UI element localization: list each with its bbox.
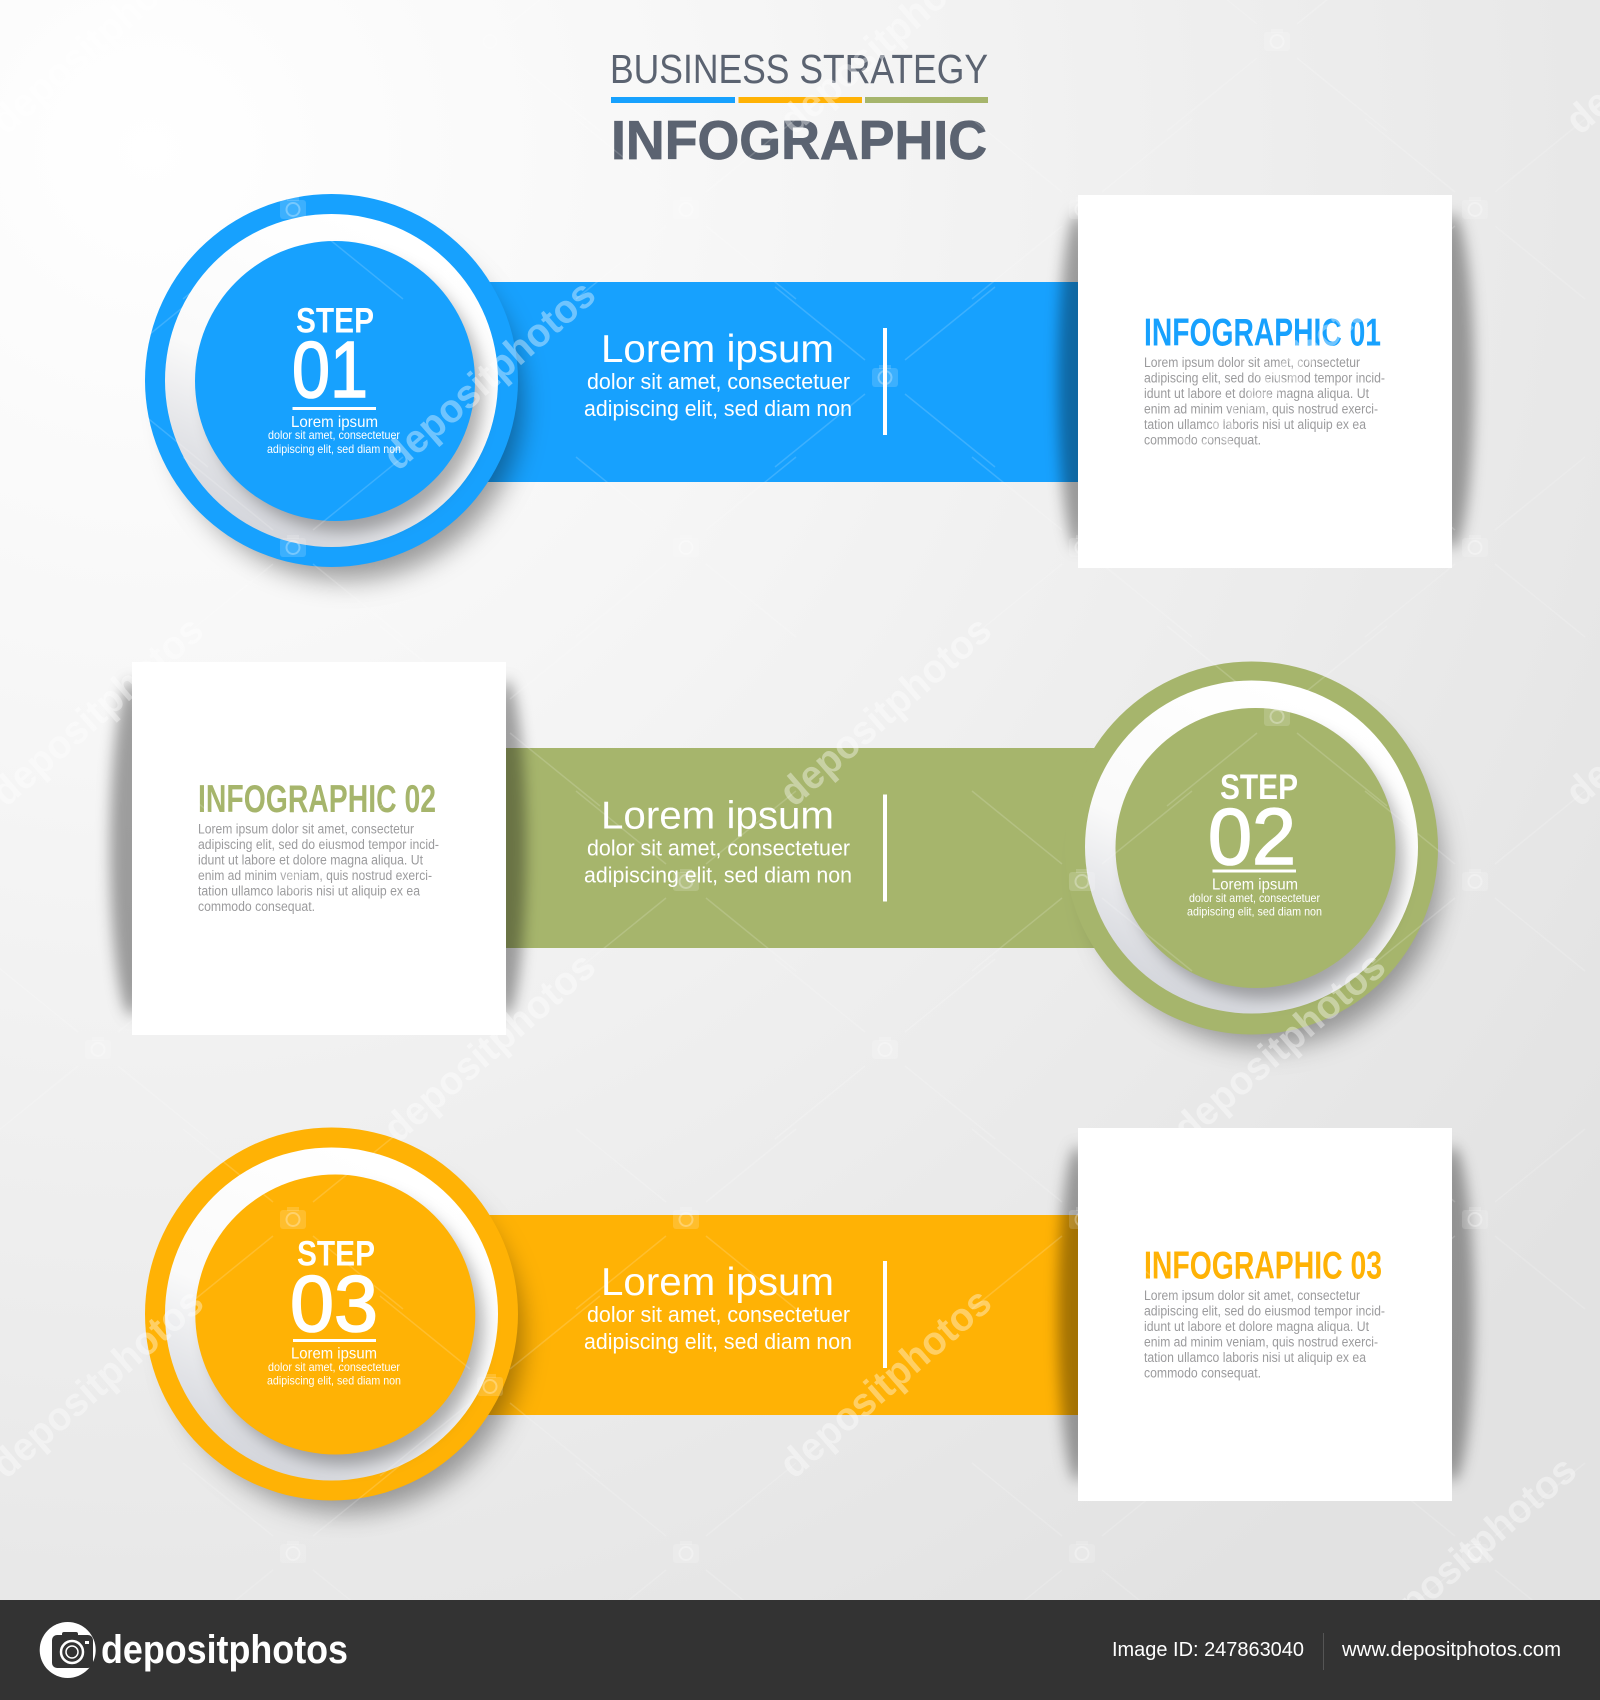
step 03 label (267, 1234, 401, 1388)
band 01 text: dolor sit amet, consectetuer (587, 369, 850, 394)
card 03 body: tation ullamco laboris nisi ut aliquip ex ea (1144, 1350, 1366, 1365)
step 01 label: 01 (292, 325, 368, 414)
band 02 text: adipiscing elit, sed diam non (584, 862, 852, 888)
card 03 heading: INFOGRAPHIC 03 (1144, 1244, 1382, 1288)
band 01 text: Lorem ipsum (601, 328, 834, 371)
band 03 (470, 1215, 1078, 1415)
footer bar (0, 1600, 1600, 1700)
card 01 body: tation ullamco laboris nisi ut aliquip ex ea (1144, 417, 1366, 432)
card 01 shadow (1058, 213, 1474, 549)
title colour rule (611, 97, 988, 103)
step 02 label: dolor sit amet, consectetuer (1189, 891, 1320, 905)
footer logo text: depositphotos (101, 1628, 348, 1672)
band 02 text (584, 794, 887, 902)
circle 02 (1065, 662, 1438, 1034)
watermark overlay: depositphotos (375, 944, 604, 1151)
card 03 (1078, 1128, 1452, 1501)
footer image id: Image ID: 247863040 (1112, 1639, 1304, 1661)
band 01 text: adipiscing elit, sed diam non (584, 396, 852, 421)
step 01 label: STEP (296, 302, 374, 340)
title: infographic: INFOGRAPHIC (611, 109, 987, 171)
watermark overlay: depositphotos (771, 608, 1000, 815)
card 03 shadow (1058, 1146, 1474, 1482)
panel: step 01 (145, 194, 1474, 580)
card 01 body: commodo consequat. (1144, 432, 1261, 448)
watermark overlay: depositphotos (1165, 944, 1394, 1151)
card 03 body: adipiscing elit, sed do eiusmod tempor incid- (1144, 1304, 1385, 1318)
step 01 label: adipiscing elit, sed diam non (267, 442, 401, 456)
circle 02 shadow (1090, 695, 1442, 1047)
band 03 text: dolor sit amet, consectetuer (587, 1302, 850, 1327)
band 01 (470, 282, 1078, 482)
step 01 label (267, 302, 401, 456)
step 02 label: Lorem ipsum (1212, 876, 1298, 894)
watermark overlay: depositphotos (1356, 1448, 1585, 1655)
band 02 text: dolor sit amet, consectetuer (587, 836, 850, 860)
step 02 label: STEP (1220, 768, 1298, 807)
step 03 label: adipiscing elit, sed diam non (267, 1374, 401, 1388)
card 01 body (1144, 355, 1385, 448)
circle 03 shadow (170, 1161, 522, 1513)
card 02 body (198, 822, 439, 914)
band 02 (505, 748, 1205, 948)
title block (610, 46, 988, 171)
icon: camera logo (40, 1622, 96, 1678)
card 01 body: enim ad minim veniam, quis nostrud exerci- (1144, 402, 1378, 416)
band 01 text (584, 328, 887, 435)
circle 01 shadow (170, 228, 522, 580)
step 01 label: Lorem ipsum (291, 414, 378, 431)
card 02 (132, 662, 506, 1035)
card 02 shadow (110, 680, 526, 1016)
circle 01 (145, 194, 518, 567)
card 03 body (1144, 1288, 1385, 1380)
card 02 body: adipiscing elit, sed do eiusmod tempor incid- (198, 837, 439, 852)
step 02 label: adipiscing elit, sed diam non (1187, 904, 1322, 918)
step 03 label: Lorem ipsum (291, 1346, 377, 1362)
watermark overlay: depositphotos (1165, 272, 1394, 479)
panel: step 03 (145, 1128, 1474, 1513)
step 02 label (1187, 768, 1322, 918)
step 02 label: 02 (1208, 792, 1296, 881)
card 01 body: idunt ut labore et dolore magna aliqua. Ut (1144, 386, 1369, 401)
circle 03 (145, 1128, 518, 1500)
card 01 body: Lorem ipsum dolor sit amet, consectetur (1144, 355, 1360, 370)
card 02 body: tation ullamco laboris nisi ut aliquip ex ea (198, 884, 420, 898)
card 01 heading: INFOGRAPHIC 01 (1144, 312, 1381, 354)
card 02 body: commodo consequat. (198, 899, 315, 914)
step 03 label: 03 (290, 1259, 378, 1348)
card 03 body: Lorem ipsum dolor sit amet, consectetur (1144, 1288, 1360, 1303)
step 01 label: dolor sit amet, consectetuer (268, 428, 400, 442)
card 01 body: adipiscing elit, sed do eiusmod tempor incid- (1144, 370, 1385, 386)
card 02 heading: INFOGRAPHIC 02 (198, 778, 436, 821)
card 03 body: idunt ut labore et dolore magna aliqua. Ut (1144, 1319, 1369, 1334)
watermark overlay: depositphotos (771, 1280, 1000, 1487)
panel: step 02 (110, 662, 1442, 1047)
band 03 text (584, 1261, 887, 1368)
band 02 text: Lorem ipsum (601, 794, 834, 838)
step 03 label: STEP (297, 1234, 375, 1274)
band 03 text: Lorem ipsum (601, 1261, 834, 1304)
card 02 body: idunt ut labore et dolore magna aliqua. Ut (198, 852, 423, 868)
band 03 text: adipiscing elit, sed diam non (584, 1329, 852, 1354)
card 01 (1078, 195, 1452, 568)
footer url: www.depositphotos.com (1341, 1639, 1561, 1661)
step 03 label: dolor sit amet, consectetuer (268, 1360, 400, 1374)
card 03 body: commodo consequat. (1144, 1366, 1261, 1380)
title: business strategy: BUSINESS STRATEGY (610, 46, 988, 92)
card 03 body: enim ad minim veniam, quis nostrud exerci- (1144, 1334, 1378, 1350)
watermark overlay: depositphotos (375, 272, 604, 479)
card 02 body: enim ad minim veniam, quis nostrud exerci- (198, 868, 432, 883)
card 02 body: Lorem ipsum dolor sit amet, consectetur (198, 822, 414, 836)
